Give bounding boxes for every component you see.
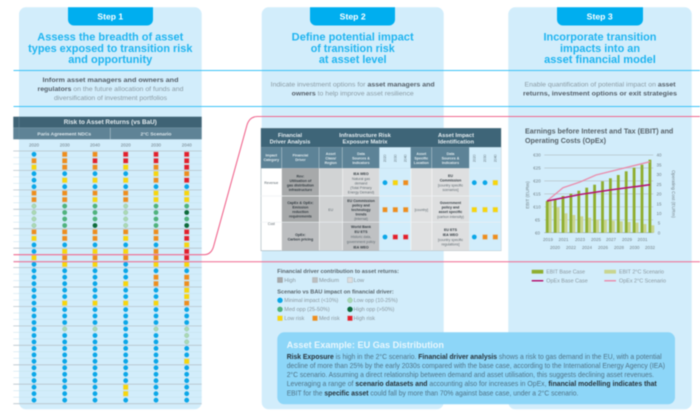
table body text: Rev:	[297, 174, 304, 178]
step 2 heading: at asset level	[319, 54, 387, 66]
legend: financial driver contribution: Low	[354, 278, 364, 284]
table sub headers: Driver	[295, 158, 306, 162]
table body text: OpEx:	[295, 233, 306, 237]
table group headers: Identification	[438, 140, 475, 146]
panel: step 2 background	[262, 7, 444, 409]
table body text: IEA WEO	[443, 233, 458, 237]
step 3 description: Enable quantification of potential impact on asset	[524, 81, 676, 88]
step 2 tab	[310, 7, 395, 26]
chart: right axis labels: 5	[658, 221, 661, 226]
connector: highlight pink outline	[14, 116, 700, 255]
table group headers: Asset Impact	[438, 133, 474, 139]
chart: left axis labels: €5	[535, 218, 540, 222]
chart: year labels: 2019	[543, 237, 554, 242]
table sub headers: Data	[357, 152, 366, 156]
table body text: Commission	[440, 178, 461, 182]
step 1 description: regulators on the future allocation of funds and	[38, 86, 184, 93]
callout body: EBIT for the specific asset could fall by more than 70% against base case, under a 2°C scenario.	[287, 388, 578, 398]
table body text: Government	[440, 201, 462, 205]
table sub headers: Location	[414, 161, 429, 165]
chart: left axis labels: €10	[533, 204, 541, 210]
chart: year labels: 2026	[598, 245, 609, 250]
risk table years: 2030	[60, 143, 70, 148]
step 1 description: Inform asset managers and owners and	[42, 77, 178, 84]
table body text: CapEx & OpEx:	[287, 201, 314, 205]
step 3 tab: Step 3	[587, 13, 613, 22]
table body text	[264, 172, 464, 250]
table body text: reduction	[292, 210, 309, 214]
table body text: EU Commission	[347, 199, 375, 203]
chart: right axis labels: Operating Cost (EURm)	[671, 170, 676, 218]
step 2 heading: of transition risk	[311, 43, 396, 55]
table body text: infrastructure	[289, 188, 312, 192]
callout body: decline of more than 25% by the early 2030s compared with the base case, according to the International Energy Agency (IEA)	[287, 361, 665, 370]
connector: lower pink line	[14, 261, 700, 263]
table body text: EU	[448, 174, 453, 178]
chart: year labels: 2028	[614, 245, 625, 250]
chart: year labels: 2030	[629, 245, 640, 250]
table body text: Historic data,	[351, 235, 371, 239]
table body text: World Bank	[351, 225, 371, 229]
risk table years: 2020	[121, 143, 131, 148]
table body text: Natural gas	[352, 177, 370, 181]
table sub headers: Financial	[293, 154, 308, 158]
table sub headers: Sources &	[442, 156, 460, 160]
table body text: trends	[356, 212, 366, 216]
table group headers: Driver Analysis	[270, 140, 310, 146]
callout body: Leveraging a range of scenario datasets and accounting also for increases in OpEx, financial modelling indicates that	[287, 379, 657, 388]
table body text: asset specific	[439, 210, 462, 214]
table body text: government policy	[347, 240, 375, 244]
step 1 heading: and opportunity	[68, 54, 152, 66]
risk table header	[13, 117, 202, 139]
table body text: IEA WEO	[353, 172, 369, 176]
chart: right axis labels: 40	[656, 153, 662, 158]
step 3 description: returns, investment options or exit strategies	[523, 90, 677, 97]
table body text: regulations]	[441, 242, 460, 246]
table sub headers: Sources &	[352, 156, 370, 160]
table group headers: Financial	[278, 133, 302, 139]
step 1 description: diversification of investment portfolios	[54, 95, 168, 102]
table body text: technology	[351, 208, 371, 212]
risk table years: 2040	[182, 143, 192, 148]
chart legend: EBIT Base Case	[546, 270, 585, 276]
chart: year labels: 2020	[550, 245, 561, 250]
table body text: Revenue	[264, 181, 278, 185]
legend: scenario impact: Low risk	[284, 316, 305, 322]
legend: scenario impact: Minimal impact (<10%)	[284, 298, 339, 304]
chart legend	[532, 270, 666, 284]
table body text: EU ETS	[355, 230, 368, 234]
chart: year labels: 2029	[622, 237, 633, 242]
risk table header: Risk to Asset Returns (vs BaU)	[64, 119, 157, 126]
chart: OpEx base case line	[547, 185, 650, 201]
chart: left axis labels: €20	[533, 179, 541, 184]
table body text: Energy Demand)	[348, 190, 374, 194]
chart: year labels: 2024	[582, 245, 593, 250]
step 1 tab	[68, 7, 153, 26]
step 3 description	[523, 81, 677, 97]
table markers	[383, 180, 498, 239]
chart: year labels	[543, 237, 656, 250]
chart legend: EBIT 2°C Scenario	[619, 270, 664, 276]
chart: EBIT 2C scenario bars	[549, 201, 654, 233]
chart: right axis labels: 30	[656, 172, 662, 177]
table body text: (carbon intensity)	[437, 215, 464, 219]
table sub headers: 2020	[472, 154, 476, 162]
step 1 heading	[28, 32, 193, 66]
table body text: [country]	[415, 208, 428, 212]
table sub headers: Indicators	[352, 161, 370, 165]
risk table header: Paris Agreement NDCs	[37, 131, 92, 136]
chart: year labels: 2025	[591, 237, 602, 242]
legend: financial driver contribution: High	[284, 278, 296, 284]
risk table header: 2°C Scenario	[140, 131, 172, 136]
chart: year labels: 2022	[566, 245, 577, 250]
legend: scenario impact: High risk	[354, 316, 375, 322]
risk table markers	[32, 152, 189, 403]
table sub headers	[261, 147, 501, 168]
chart: EBIT and OpEx	[525, 153, 676, 250]
chart: left axis labels	[525, 153, 541, 235]
table sub headers: 2020	[383, 154, 387, 162]
infrastructure risk exposure table	[261, 128, 501, 251]
legend: scenario impact: Med risk	[319, 316, 340, 322]
chart legend: OpEx 2°C Scenario	[619, 278, 666, 284]
table body text: [country specific	[438, 184, 463, 188]
legend: scenario impact: Med opp (25-50%)	[284, 307, 330, 313]
callout body: Risk Exposure is high in the 2°C scenario. Financial driver analysis shows a risk to gas demand in the EU, with a potential	[287, 352, 662, 361]
legend: scenario impact	[277, 289, 398, 322]
step 1 description	[38, 77, 184, 102]
chart: OpEx 2C scenario line	[547, 162, 650, 201]
table sub headers: Asset	[416, 152, 427, 156]
step 2 tab: Step 2	[340, 13, 366, 22]
table body text: policy and	[352, 204, 370, 208]
table body text: scenarios]	[443, 188, 459, 192]
step 3 heading: impacts into an	[560, 43, 640, 55]
chart: right axis labels: 0	[658, 230, 661, 235]
step 1 heading: types exposed to transition risk	[28, 43, 193, 55]
step 2 description	[271, 81, 435, 97]
chart: year labels: 2023	[575, 237, 586, 242]
chart: left axis labels: €30	[533, 153, 541, 158]
chart: year labels: 2027	[606, 237, 617, 242]
step 3 heading: Incorporate transition	[544, 32, 656, 44]
step 1 tab: Step 1	[97, 13, 124, 22]
table body text: Emission	[292, 206, 308, 210]
chart title: Earnings before Interest and Tax (EBIT) and	[525, 126, 673, 135]
table sub headers: Category	[264, 158, 279, 162]
legend: scenario impact: High opp (>50%)	[354, 307, 395, 313]
table body text: Carbon pricing	[288, 238, 313, 242]
chart: left axis labels: EBIT (EURm)	[525, 181, 530, 209]
chart: EBIT base case bars	[546, 160, 651, 233]
risk matrix table	[13, 117, 202, 404]
table body text: Utilisation of	[290, 179, 312, 183]
table sub headers: Impact	[266, 154, 278, 158]
callout heading: Asset Example: EU Gas Distribution	[287, 340, 444, 350]
callout: asset example	[277, 332, 675, 404]
chart: year labels: 2032	[645, 245, 656, 250]
legend: step 2	[277, 269, 399, 322]
step 3 heading: asset financial model	[544, 54, 656, 66]
chart title	[525, 126, 673, 145]
step 3 heading	[544, 32, 656, 66]
table body text: IEA WEO	[353, 246, 369, 250]
step 2 description: Indicate investment options for asset managers and	[271, 81, 435, 88]
risk table years	[29, 143, 192, 148]
legend: scenario impact: Scenario vs BAU impact on financial driver:	[277, 289, 394, 295]
legend: financial driver contribution: Financial driver contribution to asset returns:	[277, 269, 399, 275]
step 2 description: owners to help improve asset resilience	[292, 90, 414, 97]
table body text: requirements	[289, 214, 312, 218]
table body text: EU ETS	[444, 228, 458, 232]
table group headers	[261, 128, 501, 147]
table sub headers: 2040	[493, 154, 497, 162]
table sub headers: Region	[325, 161, 337, 165]
chart: left axis labels: €0	[535, 230, 540, 235]
table group headers: Infrastructure Risk	[339, 133, 392, 139]
chart: right axis labels: 15	[656, 201, 662, 206]
table body text: [country specific	[438, 238, 463, 242]
panel: step 3 background	[508, 7, 692, 409]
table sub headers: Class/	[325, 156, 336, 160]
callout body	[287, 352, 665, 398]
chart: right axis labels	[656, 153, 676, 235]
chart: left axis labels: €15	[533, 192, 541, 197]
step 2 heading: Define potential impact	[292, 32, 414, 44]
table body text: demand	[355, 182, 367, 186]
risk table years: 2030	[151, 143, 162, 148]
chart legend: OpEx Base Case	[546, 278, 588, 284]
risk table years: 2020	[29, 143, 40, 148]
legend: scenario impact: Low opp (10-25%)	[354, 298, 398, 304]
step 2 heading	[292, 32, 414, 66]
table group headers: Exposure Matrix	[342, 140, 388, 146]
chart: right axis labels: 25	[656, 182, 662, 187]
table sub headers: Data	[447, 152, 455, 156]
chart: right axis labels: 20	[656, 192, 662, 196]
table sub headers: 2030	[393, 154, 397, 162]
legend: financial driver contribution: Medium	[319, 278, 339, 284]
chart: left axis labels: €25	[533, 166, 541, 171]
panel: step 1 background	[19, 7, 202, 409]
table sub headers: Specific	[414, 156, 428, 160]
step 3 tab	[557, 7, 643, 26]
table body cells	[261, 168, 501, 251]
legend: financial driver contribution	[277, 269, 399, 284]
chart: right axis labels: 35	[656, 162, 662, 167]
risk table years: 2040	[90, 143, 101, 148]
table body text: EU	[328, 208, 334, 212]
table sub headers: 2040	[404, 154, 408, 162]
table body text: policy and	[442, 206, 459, 210]
table body text: (internal)	[354, 217, 368, 221]
step 1 heading: Assess the breadth of asset	[37, 32, 184, 44]
table body text: (Total Primary	[350, 186, 372, 190]
callout body: 2°C scenario. Assuming a direct relationship between demand and asset utilisation, this suggests declining asset revenues.	[287, 370, 654, 379]
table sub headers: Indicators	[442, 161, 459, 165]
chart: right axis labels: 10	[656, 211, 662, 216]
table sub headers: 2030	[483, 154, 487, 162]
table body text: Cost	[268, 222, 275, 226]
chart: year labels: 2031	[637, 237, 648, 242]
table sub headers: Asset	[326, 152, 336, 156]
chart: year labels: 2021	[558, 237, 569, 242]
table body text: gas distribution	[287, 184, 314, 188]
chart title: Operating Costs (OpEx)	[525, 136, 607, 145]
